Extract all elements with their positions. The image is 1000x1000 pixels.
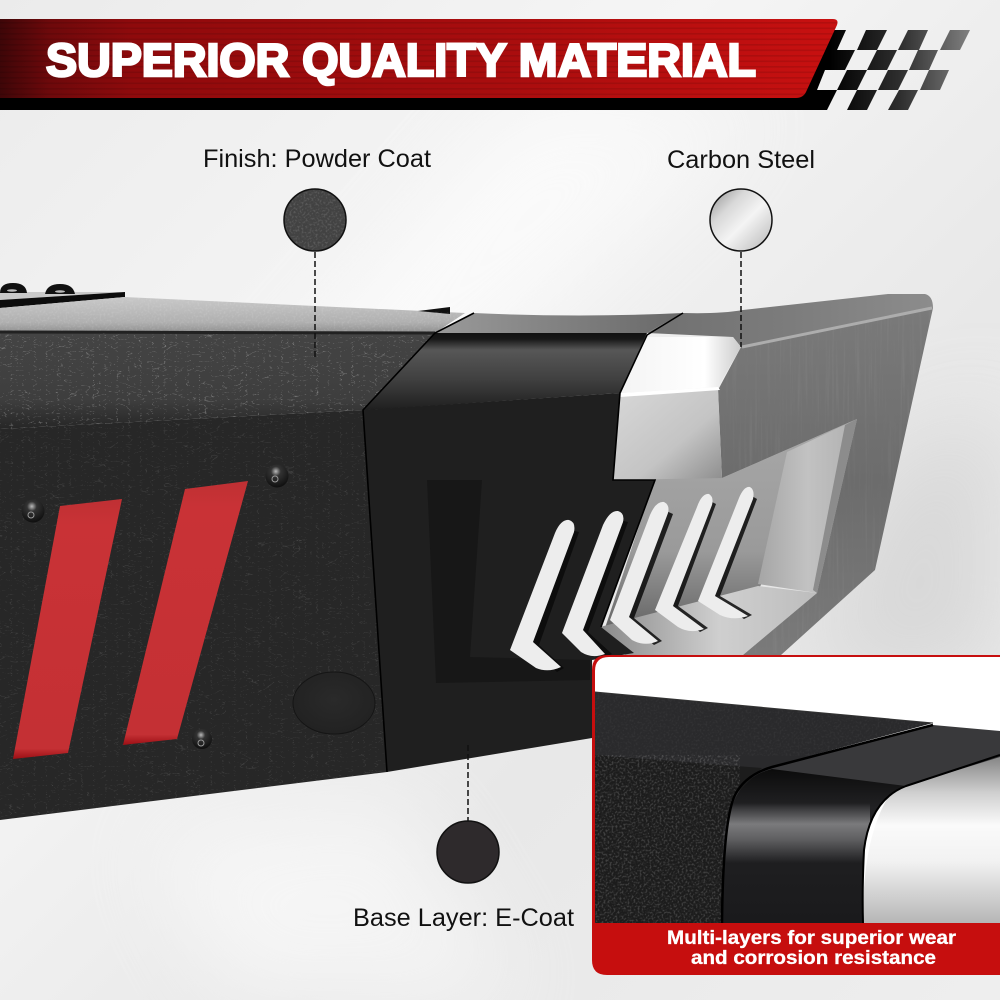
mounting plate with bolts <box>0 283 125 308</box>
screw: bottom <box>192 729 212 749</box>
top band <box>435 313 683 333</box>
slot cutouts <box>510 487 754 670</box>
corner front <box>613 388 722 480</box>
label text: Base Layer: E-Coat <box>353 904 574 932</box>
dashed leader lines <box>315 252 741 821</box>
powder coat layer <box>595 692 932 858</box>
checkered flag <box>0 30 970 110</box>
label text: Finish: Powder Coat <box>203 145 431 173</box>
title text: SUPERIOR QUALITY MATERIAL <box>46 34 756 86</box>
product: steel section <box>600 294 940 660</box>
upper sloped face <box>0 332 435 429</box>
back wall <box>601 419 857 640</box>
brushed texture <box>715 305 940 660</box>
swatch: smooth dark <box>437 821 499 883</box>
screw: top right <box>266 464 288 488</box>
top surface <box>0 297 465 333</box>
front plate <box>363 393 655 772</box>
caption: and corrosion resistance <box>691 947 936 969</box>
bright corner top <box>620 337 741 393</box>
angled face <box>363 333 647 410</box>
caption <box>667 927 956 969</box>
close-up image <box>595 657 1000 923</box>
recess <box>427 480 590 683</box>
seam lines <box>363 313 683 772</box>
inner side wall <box>758 419 857 593</box>
label text: Carbon Steel <box>667 146 815 174</box>
leather texture <box>0 295 470 823</box>
inset panel: close-up of layers <box>592 655 1000 975</box>
floor <box>600 586 817 655</box>
red reflector left <box>13 499 122 759</box>
product: e-coat black section <box>363 313 683 772</box>
steel side face <box>718 308 933 655</box>
title banner <box>0 19 970 110</box>
product: black textured section <box>0 283 470 823</box>
swatch: textured black <box>284 189 346 251</box>
red banner shape <box>0 19 838 98</box>
label: carbon steel <box>667 146 815 251</box>
label: powder coat finish <box>203 145 431 251</box>
steel top band <box>647 294 933 347</box>
red reflector right <box>123 481 248 745</box>
caption: Multi-layers for superior wear <box>667 927 956 949</box>
bevel <box>813 419 857 593</box>
label: e-coat base layer <box>353 821 574 932</box>
chrome layer <box>863 752 1000 923</box>
front face <box>0 410 387 820</box>
panel frame <box>592 655 1000 975</box>
edge highlight <box>742 308 932 347</box>
slot shadows <box>528 495 757 672</box>
vent slots <box>510 487 757 672</box>
screw: left <box>22 500 44 522</box>
plug <box>293 672 375 734</box>
e-coat layer <box>732 725 1000 806</box>
swatch: silver <box>710 189 772 251</box>
